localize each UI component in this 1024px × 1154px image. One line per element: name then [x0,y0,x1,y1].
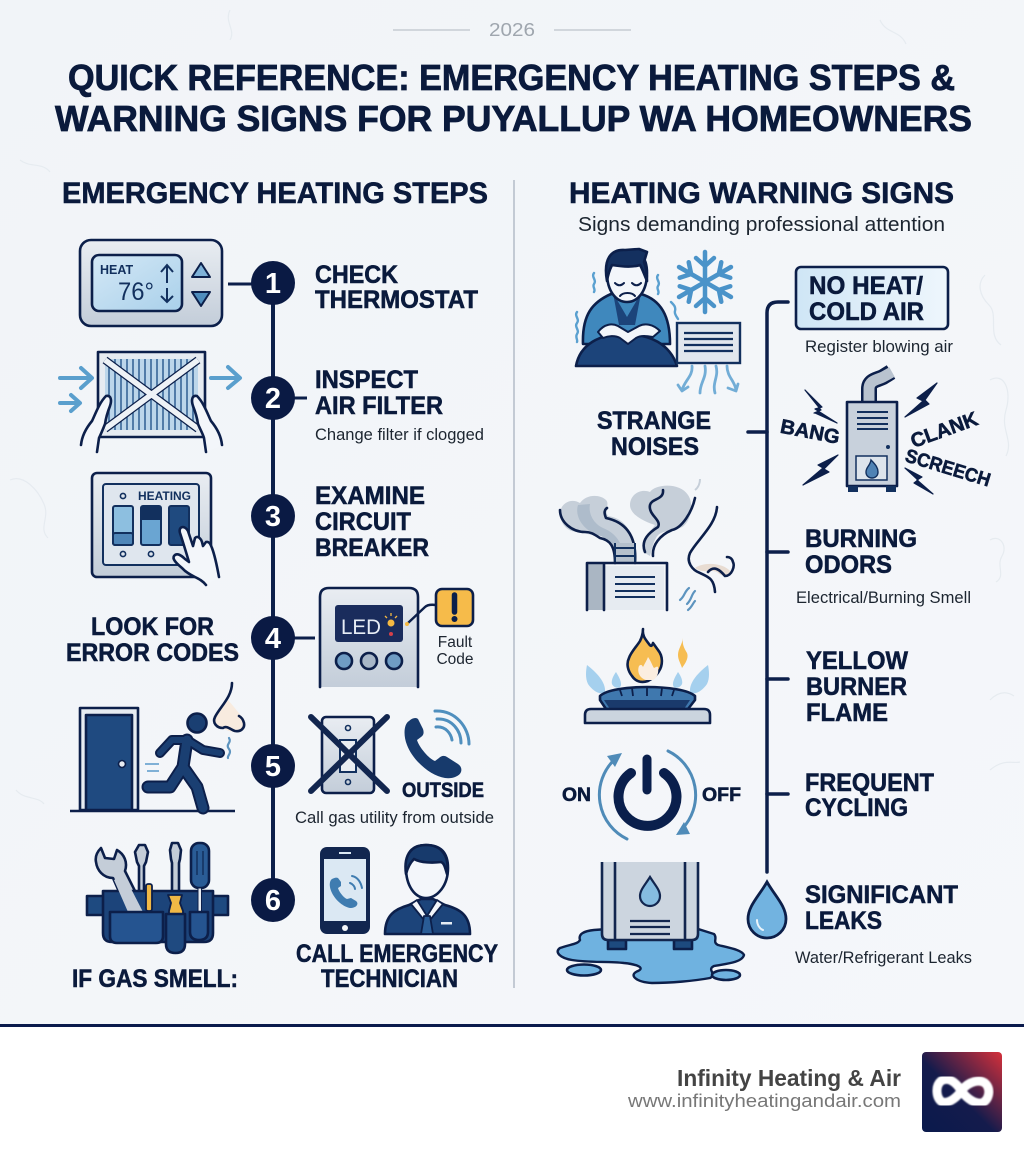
label: frequent cycling: FREQUENT [805,769,934,797]
panel: emergency steps timeline [228,261,315,922]
label: yellow burner flame: BURNER [806,673,907,701]
step number 4 [251,616,295,660]
label: yellow burner flame [806,647,908,727]
label: outside and gas utility note: Call gas utility from outside [295,808,494,827]
step number 5: 5 [265,751,281,783]
icon: power cycling [562,751,741,839]
label: look for error codes [66,613,239,667]
icon: thermostat: HEAT [100,263,133,277]
footer website: www.infinityheatingandair.com [627,1090,901,1111]
label: outside and gas utility note [295,779,494,827]
label: strange noises: NOISES [611,433,699,461]
label: examine circuit breaker [315,482,429,562]
label: significant leaks [795,881,972,967]
heading: heating warning signs [569,177,954,236]
label: call emergency technician: CALL EMERGENCY [296,940,498,968]
icon: technician [385,845,470,934]
label: inspect air filter: INSPECT [315,366,418,394]
label: inspect air filter: Change filter if clogged [315,425,484,444]
label: examine circuit breaker: CIRCUIT [315,508,411,536]
icon: noisy furnace [778,372,993,494]
label: frequent cycling: CYCLING [805,794,908,822]
icon: do not use switch [311,717,387,793]
label: strange noises [597,407,711,461]
label: frequent cycling [805,769,934,822]
label: inspect air filter: AIR FILTER [315,392,443,420]
icon: power cycling: OFF [702,785,741,806]
label: significant leaks: Water/Refrigerant Leaks [795,948,972,967]
step number 3: 3 [265,501,281,533]
icon: nose smelling gas [214,683,244,758]
label: significant leaks: SIGNIFICANT [805,881,958,909]
title: WARNING SIGNS FOR PUYALLUP WA HOMEOWNERS [55,98,972,139]
label: significant leaks: LEAKS [805,907,882,935]
label: no heat cold air: Register blowing air [805,337,953,356]
icon: power cycling: ON [562,785,591,806]
label: burning odors: BURNING [805,525,917,553]
year label: 2026 [489,20,535,40]
icon: snowflake [675,252,735,312]
label: check thermostat: THERMOSTAT [315,286,478,314]
icon: air filter [60,352,240,452]
label: examine circuit breaker: EXAMINE [315,482,425,510]
label: burning odors: ODORS [805,551,892,579]
icon: smartphone call [320,847,370,934]
title [55,57,972,139]
icon: noisy furnace: BANG [778,416,842,449]
label: call emergency technician [296,940,498,993]
icon: phone with signal [405,711,469,778]
icon: thermostat: 76° [118,278,154,306]
label: strange noises: STRANGE [597,407,711,435]
label: if gas smell: IF GAS SMELL: [72,965,238,993]
icon: leaking unit with puddle [558,862,744,983]
icon: circuit breaker: HEATING [138,489,191,503]
icon: noisy furnace: SCREECH [903,446,993,492]
step number 6: 6 [265,885,281,917]
label: no heat cold air: COLD AIR [809,298,924,326]
icon: vent blowing air [677,323,740,393]
panel: warning signs tree [748,302,788,872]
icon: cold person [576,249,678,366]
icon: LED fault panel: LED [341,616,381,639]
icon: tool belt [87,843,228,953]
label: burning odors [796,525,971,607]
label: check thermostat [315,261,478,314]
icon: burning smoke furnace [560,479,700,610]
label: outside and gas utility note: OUTSIDE [402,779,484,802]
label: check thermostat: CHECK [315,261,398,289]
icon: water drop [748,882,786,938]
step number 1 [251,261,295,305]
icon: warning fault code: Fault [438,634,473,651]
label: no heat cold air [796,267,953,356]
label: burning odors: Electrical/Burning Smell [796,588,971,607]
step number 3 [251,494,295,538]
footer brand name: Infinity Heating & Air [677,1065,901,1091]
icon: warning fault code [436,589,474,668]
label: examine circuit breaker: BREAKER [315,534,429,562]
icon: circuit breaker [92,473,219,585]
step number 4: 4 [265,623,281,655]
icon: LED fault panel [320,588,436,687]
icon: noisy furnace: CLANK [908,408,982,453]
icon: warning fault code: Code [436,651,474,668]
footer logo [922,1052,1002,1132]
label: inspect air filter [315,366,484,444]
step number 2: 2 [265,383,281,415]
label: no heat cold air: NO HEAT/ [809,272,923,300]
step number 5 [251,744,295,788]
label: call emergency technician: TECHNICIAN [321,965,458,993]
icon: gas burner flame [585,629,710,723]
heading: heating warning signs: Signs demanding professional attention [578,214,945,236]
heading: emergency heating steps: EMERGENCY HEATING STEPS [62,177,488,210]
label: look for error codes: LOOK FOR [91,613,214,641]
label: yellow burner flame: FLAME [806,699,888,727]
icon: person leaving through door [70,708,235,811]
step number 2 [251,376,295,420]
label: look for error codes: ERROR CODES [66,639,239,667]
step number 6 [251,878,295,922]
step number 1: 1 [265,268,281,300]
label: yellow burner flame: YELLOW [806,647,908,675]
footer band [0,1024,1024,1154]
heading: heating warning signs: HEATING WARNING SIGNS [569,177,954,210]
icon: smelling nose [680,507,734,610]
title: QUICK REFERENCE: EMERGENCY HEATING STEPS & [68,57,955,98]
icon: thermostat [80,240,222,326]
